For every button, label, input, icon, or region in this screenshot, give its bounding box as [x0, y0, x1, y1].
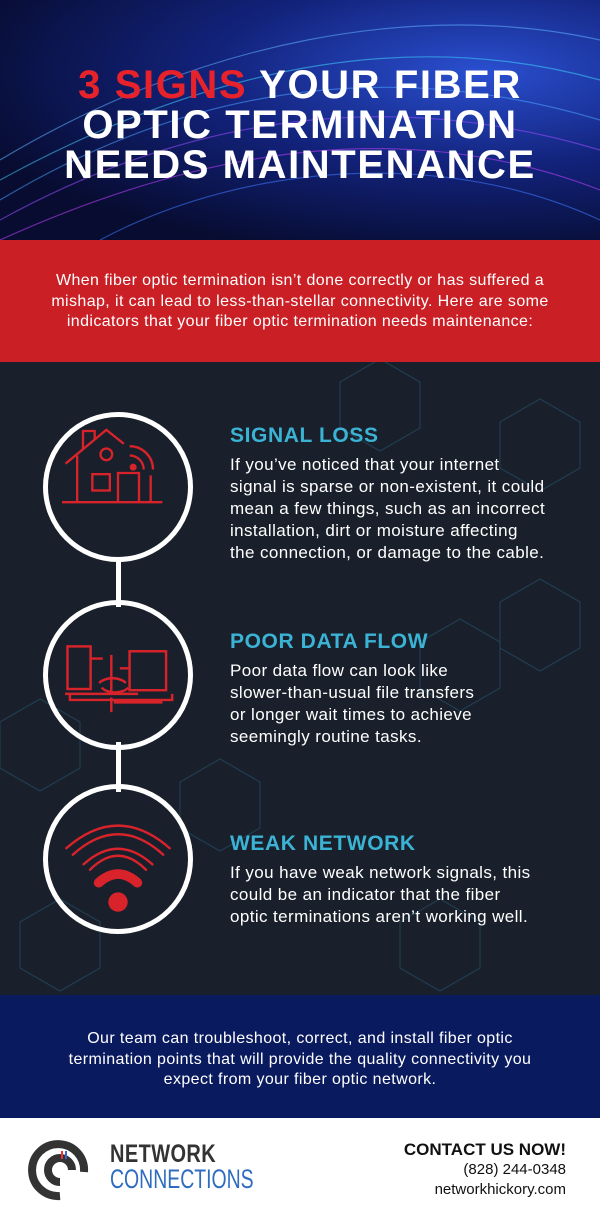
text: signal loss: mean a few things, such as an incorrect [230, 499, 545, 518]
text: weak network: optic terminations aren’t working well. [230, 907, 528, 926]
contact: networkhickory.com [435, 1181, 566, 1198]
text: poor data flow: slower-than-usual file transfers [230, 683, 474, 702]
closing panel: expect from your fiber optic network. [164, 1071, 436, 1088]
closing panel: Our team can troubleshoot, correct, and install fiber optic [87, 1030, 513, 1047]
logo: NETWORK [110, 1140, 216, 1168]
contact: CONTACT US NOW! [404, 1140, 566, 1159]
intro panel: indicators that your fiber optic termination needs maintenance: [67, 313, 533, 330]
title [64, 63, 536, 187]
text: signal loss: the connection, or damage to the cable. [230, 543, 544, 562]
text: signal loss: If you’ve noticed that your internet [230, 455, 500, 474]
intro panel [0, 240, 600, 362]
text: poor data flow: or longer wait times to achieve [230, 705, 472, 724]
header [0, 0, 600, 240]
closing panel: termination points that will provide the quality connectivity you [69, 1050, 531, 1068]
text: signal loss: installation, dirt or moisture affecting [230, 521, 518, 540]
icon: house [43, 412, 193, 562]
connector lines [116, 557, 121, 607]
title: NEEDS MAINTENANCE [64, 143, 536, 187]
closing panel [0, 995, 600, 1118]
text: signal loss: SIGNAL LOSS [230, 424, 379, 447]
intro panel: When fiber optic termination isn’t done correctly or has suffered a [56, 272, 544, 289]
icon: data flow [43, 600, 193, 750]
contact [404, 1140, 566, 1198]
text: poor data flow [230, 630, 474, 746]
text: signal loss [230, 424, 545, 562]
intro panel: mishap, it can lead to less-than-stellar connectivity. Here are some [51, 292, 549, 310]
text: weak network: could be an indicator that the fiber [230, 885, 501, 904]
text: poor data flow: POOR DATA FLOW [230, 630, 428, 653]
contact: (828) 244-0348 [463, 1161, 566, 1178]
title: OPTIC TERMINATION [82, 103, 518, 147]
title: 3 SIGNS YOUR FIBER [78, 63, 522, 107]
logo: CONNECTIONS [110, 1164, 254, 1194]
text: weak network: If you have weak network signals, this [230, 863, 531, 882]
panel: signs [0, 362, 600, 995]
text: poor data flow: seemingly routine tasks. [230, 727, 422, 746]
icon: wifi [43, 784, 193, 934]
text: weak network [230, 832, 531, 926]
text: signal loss: signal is sparse or non-existent, it could [230, 477, 544, 496]
text: weak network: WEAK NETWORK [230, 832, 416, 855]
text: poor data flow: Poor data flow can look like [230, 661, 448, 680]
logo [28, 1140, 254, 1200]
